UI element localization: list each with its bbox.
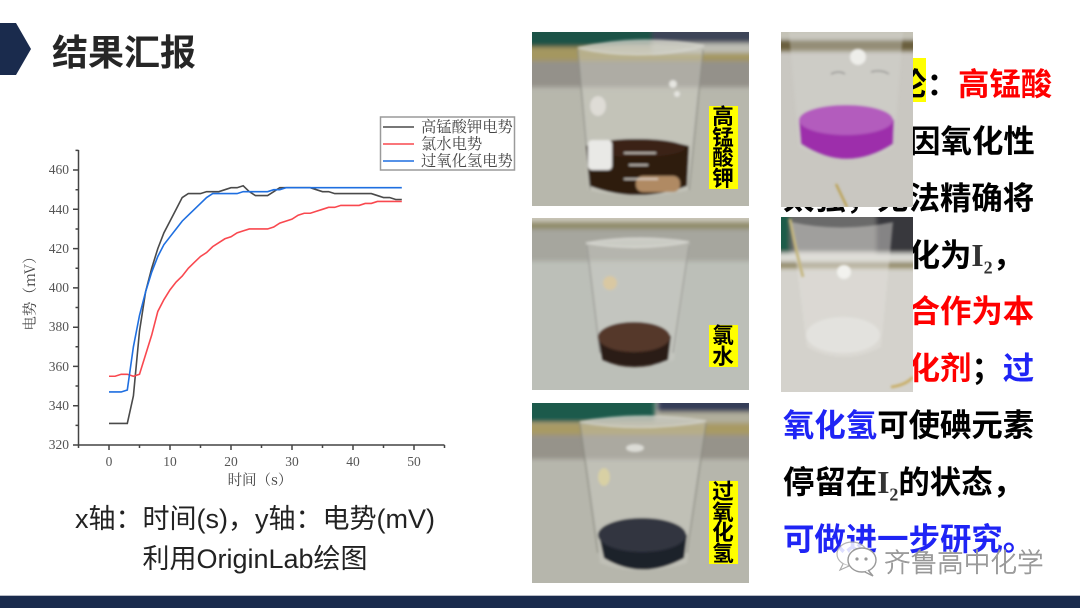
- y axis tick labels: 440: [49, 202, 69, 217]
- label: chlorine water: 水: [712, 340, 734, 371]
- label: hydrogen peroxide: 过: [712, 475, 734, 506]
- caption: axis description: [75, 504, 435, 574]
- x axis tick labels: [106, 454, 421, 469]
- line chart: potential vs time: [19, 115, 516, 490]
- label: hydrogen peroxide: [708, 481, 738, 564]
- label: chlorine water: 氯: [712, 319, 734, 350]
- y axis tick labels: 400: [49, 280, 69, 295]
- y axis tick labels: 340: [49, 398, 69, 413]
- photo: beaker with purple solution: [781, 32, 913, 207]
- legend: 氯水电势: [421, 132, 482, 154]
- y axis tick labels: 420: [49, 241, 69, 256]
- label: potassium permanganate: 锰: [712, 121, 734, 152]
- label: potassium permanganate: 酸: [712, 141, 734, 172]
- watermark text: 齐鲁高中化学: [884, 541, 1044, 580]
- caption: axis description: 利用OriginLab绘图: [142, 544, 368, 574]
- y axis tick labels: [49, 162, 69, 452]
- y axis title: 电势（mV）: [19, 249, 40, 331]
- legend: [380, 115, 514, 171]
- x axis title: 时间（s）: [228, 469, 292, 490]
- x axis tick labels: 50: [407, 454, 421, 469]
- photo: beaker with chlorine water: [532, 218, 749, 390]
- label: hydrogen peroxide: 化: [712, 516, 734, 547]
- photo: beaker with clear solution: [781, 217, 913, 392]
- series: chlorine water: [109, 201, 402, 376]
- label: potassium permanganate: [708, 106, 738, 189]
- data lines: [109, 186, 402, 423]
- photo: beaker with hydrogen peroxide: [532, 403, 749, 583]
- x axis tick labels: 30: [285, 454, 299, 469]
- conclusion text: 实验的氧化剂；过: [783, 344, 1034, 389]
- conclusion text: 钾溶液因氧化性: [815, 117, 1035, 162]
- label: chlorine water: [708, 325, 738, 366]
- watermark icon: chat bubbles: [836, 541, 877, 577]
- label: potassium permanganate: 高: [712, 100, 734, 131]
- x axis tick labels: 20: [224, 454, 238, 469]
- conclusion text: 停留在I2的状态，: [783, 458, 1024, 504]
- series: hydrogen peroxide: [109, 188, 402, 392]
- label: potassium permanganate: 钾: [712, 162, 734, 193]
- label: hydrogen peroxide: 氢: [712, 537, 734, 568]
- series: potassium permanganate: [109, 186, 402, 423]
- y axis tick labels: 460: [49, 162, 69, 177]
- icon: title arrow: [0, 23, 31, 75]
- legend: 高锰酸钾电势: [421, 115, 513, 137]
- title: 结果汇报: [52, 24, 196, 76]
- conclusion text: 氯水更适合作为本: [783, 287, 1034, 332]
- y axis tick labels: 380: [49, 319, 69, 334]
- x axis tick labels: 10: [163, 454, 177, 469]
- caption: axis description: x轴：时间(s)，y轴：电势(mV): [75, 504, 435, 534]
- chart axes: [73, 150, 444, 450]
- footer bar: [0, 595, 1080, 608]
- conclusion text: 氧化氢可使碘元素: [783, 401, 1034, 446]
- conclusion text: 可做进一步研究。: [783, 515, 1034, 560]
- conclusion text: 碘离子氧化为I2，: [783, 231, 1024, 277]
- y axis tick labels: 360: [49, 359, 69, 374]
- y axis tick labels: 320: [49, 437, 69, 452]
- legend: 过氧化氢电势: [421, 149, 513, 171]
- photo: beaker with potassium permanganate: [532, 32, 749, 206]
- conclusion text: 太强，无法精确将: [783, 174, 1034, 219]
- x axis tick labels: 40: [346, 454, 360, 469]
- label: hydrogen peroxide: 氧: [712, 496, 734, 527]
- x axis tick labels: 0: [106, 454, 113, 469]
- conclusion text: 实验结论：高锰酸: [801, 60, 1052, 105]
